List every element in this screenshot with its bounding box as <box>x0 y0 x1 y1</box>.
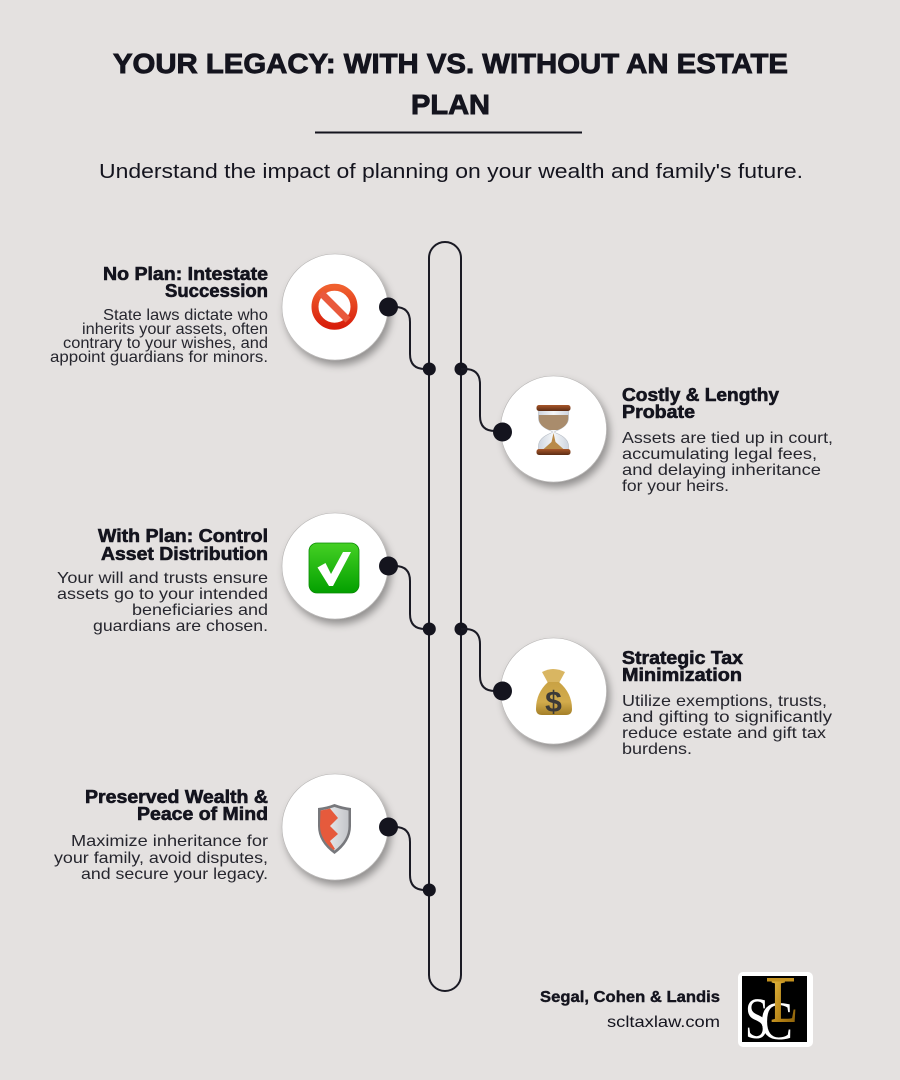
heading: probate: Costly & Lengthy <box>622 385 779 405</box>
connector: no plan <box>389 307 436 376</box>
panel: preserved wealth <box>54 774 436 896</box>
title: YOUR LEGACY: WITH VS. WITHOUT AN ESTATE <box>113 48 788 79</box>
icon circle: preserved wealth <box>282 774 388 880</box>
body: preserved wealth: your family, avoid disputes, <box>54 850 268 867</box>
heading: tax minimization: Strategic Tax <box>622 648 743 668</box>
body: preserved wealth: and secure your legacy. <box>81 866 268 883</box>
connector: probate <box>454 362 503 431</box>
body: tax minimization: Utilize exemptions, trusts, <box>622 693 827 710</box>
footer website: scltaxlaw.com <box>607 1014 720 1031</box>
icon circle: with plan <box>282 513 388 619</box>
logo: S <box>745 986 769 1051</box>
body: tax minimization: burdens. <box>622 741 692 758</box>
logo <box>738 965 813 1051</box>
title <box>113 48 788 120</box>
icon circle: tax minimization <box>500 638 606 744</box>
body: no plan: inherits your assets, often <box>82 321 268 338</box>
heading: probate: Probate <box>622 402 695 422</box>
body: no plan: contrary to your wishes, and <box>63 335 268 352</box>
body: with plan: beneficiaries and <box>132 602 268 619</box>
body: with plan: assets go to your intended <box>57 586 268 603</box>
body: preserved wealth <box>54 833 269 883</box>
icon: green check mark <box>309 543 359 593</box>
icon: money bag <box>536 669 572 719</box>
body: tax minimization <box>622 693 832 758</box>
heading: probate <box>622 385 779 422</box>
icon circle: probate <box>500 376 606 482</box>
heading: no plan: Succession <box>165 281 268 301</box>
body: tax minimization: and gifting to significantly <box>622 709 832 726</box>
body: no plan: State laws dictate who <box>103 307 268 324</box>
panel: tax minimization <box>454 622 832 758</box>
title: PLAN <box>411 89 490 120</box>
title underline <box>315 132 582 134</box>
icon circle: no plan <box>282 254 388 360</box>
panel: with plan <box>57 513 436 636</box>
heading: with plan: With Plan: Control <box>98 526 268 546</box>
logo: C <box>760 991 793 1051</box>
big dot: preserved wealth <box>379 818 398 836</box>
body: with plan: guardians are chosen. <box>93 618 268 635</box>
big dot: tax minimization <box>493 682 512 700</box>
icon: money bag: $ <box>545 686 562 719</box>
body: probate: accumulating legal fees, <box>622 446 817 463</box>
body: probate: for your heirs. <box>622 478 729 495</box>
heading: tax minimization <box>622 648 743 685</box>
body: probate: Assets are tied up in court, <box>622 430 833 447</box>
body: with plan <box>57 570 268 635</box>
heading: no plan: No Plan: Intestate <box>103 264 268 284</box>
heading: no plan <box>103 264 268 301</box>
icon: shield <box>318 804 351 854</box>
body: no plan <box>50 307 268 366</box>
body: with plan: Your will and trusts ensure <box>57 570 268 587</box>
big dot: with plan <box>379 556 398 576</box>
body: probate <box>622 430 833 495</box>
body: preserved wealth: Maximize inheritance for <box>71 833 269 850</box>
icon: prohibited sign <box>315 287 354 326</box>
subtitle: Understand the impact of planning on your wealth and family's future. <box>99 161 803 183</box>
logo: L <box>771 965 797 1036</box>
connector: preserved wealth <box>389 827 436 896</box>
heading: preserved wealth: Peace of Mind <box>137 804 268 824</box>
connector: tax minimization <box>454 622 503 691</box>
panel: probate <box>454 362 833 495</box>
big dot: no plan <box>379 298 398 316</box>
heading: with plan: Asset Distribution <box>101 544 268 564</box>
heading: tax minimization: Minimization <box>622 665 742 685</box>
panel: no plan <box>50 254 436 376</box>
icon: hourglass <box>536 405 570 455</box>
footer firm name: Segal, Cohen & Landis <box>540 989 720 1006</box>
body: no plan: appoint guardians for minors. <box>50 349 268 366</box>
body: probate: and delaying inheritance <box>622 462 821 479</box>
heading: preserved wealth: Preserved Wealth & <box>85 787 268 807</box>
big dot: probate <box>493 422 512 442</box>
heading: preserved wealth <box>85 787 268 824</box>
connector: with plan <box>389 566 436 636</box>
body: tax minimization: reduce estate and gift tax <box>622 725 826 742</box>
central timeline track <box>429 242 461 991</box>
heading: with plan <box>98 526 268 564</box>
